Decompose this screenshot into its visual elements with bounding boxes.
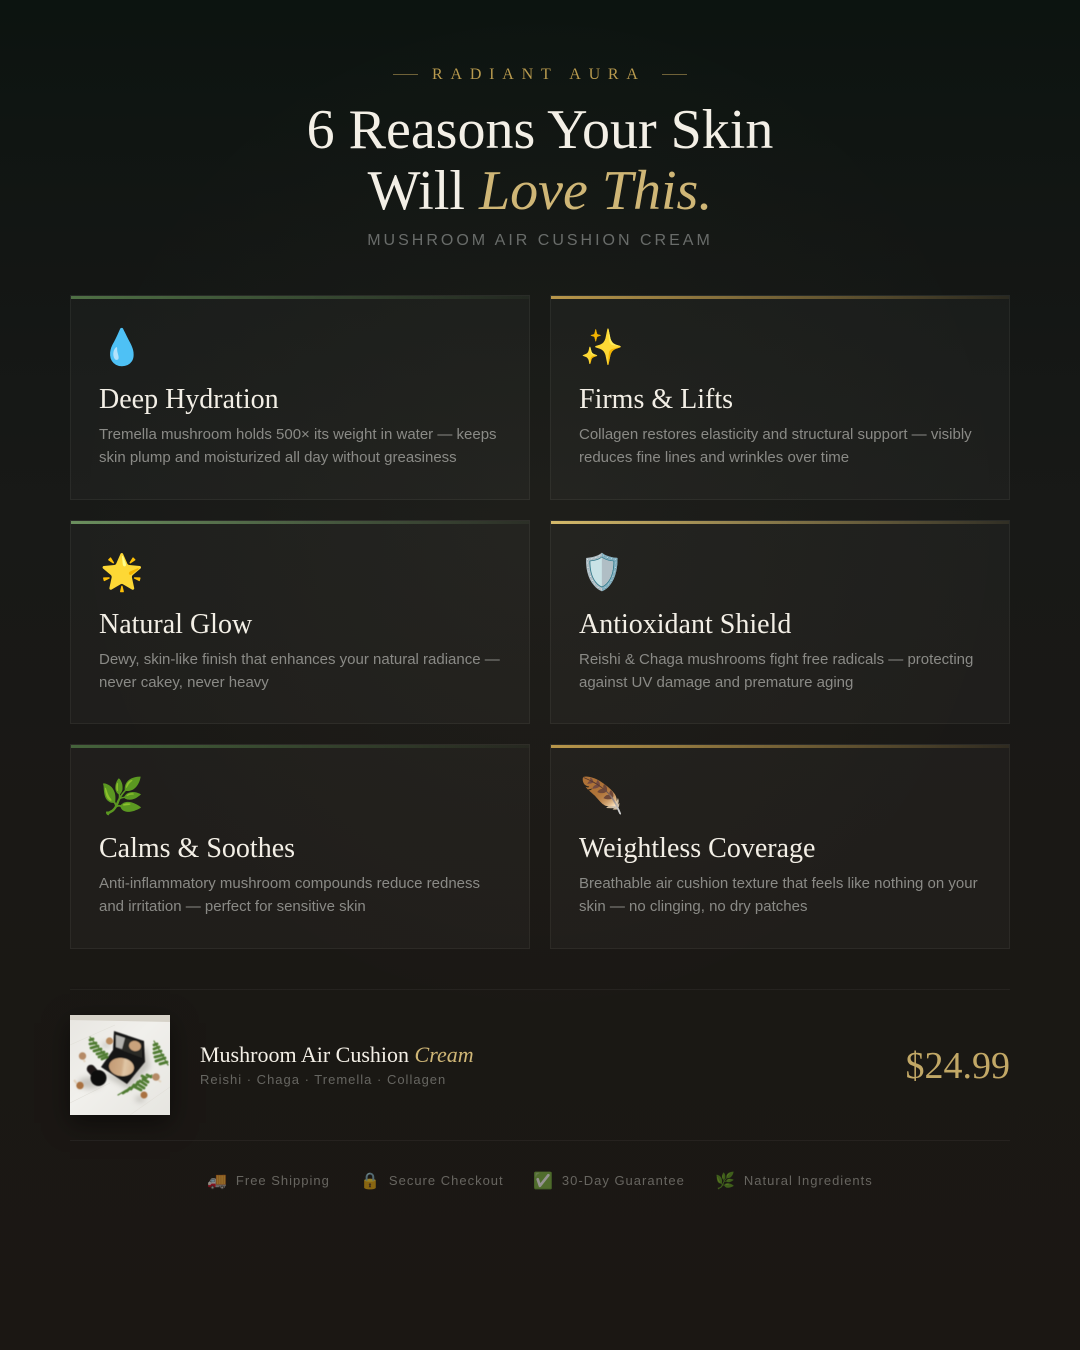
icon: shield: 🛡️ <box>580 552 624 593</box>
text: deep hydration: Tremella mushroom holds 500× its weight in water — keeps skin plump and moisturized all day without greasiness <box>99 426 497 466</box>
title: 6 Reasons Your Skin <box>307 99 773 161</box>
text: weightless coverage: Breathable air cushion texture that feels like nothing on your skin — no clinging, no dry patches <box>579 875 978 915</box>
panel: deep hydration <box>70 295 530 500</box>
brand eyebrow: RADIANT AURA <box>432 66 646 83</box>
text: antioxidant shield: Reishi & Chaga mushrooms fight free radicals — protecting against UV damage and premature aging <box>579 651 973 691</box>
text: calms and soothes: Anti-inflammatory mushroom compounds reduce redness and irritation — perfect for sensitive skin <box>99 875 480 915</box>
product name: Mushroom Air Cushion Cream <box>200 1042 474 1067</box>
title <box>307 99 773 222</box>
panel: antioxidant shield <box>550 520 1010 724</box>
trust: natural ingredients: 🌿 Natural Ingredients <box>715 1171 873 1190</box>
text: natural glow: Dewy, skin-like finish that enhances your natural radiance — never cakey, never heavy <box>99 651 500 691</box>
panel: natural glow <box>70 520 530 724</box>
icon: glowing star: 🌟 <box>100 552 144 593</box>
panel: firms and lifts <box>550 295 1010 500</box>
icon: feather: 🪶 <box>580 776 624 817</box>
icon: water drop: 💧 <box>100 327 144 368</box>
panel: weightless coverage <box>550 744 1010 949</box>
trust: guarantee: ✅ 30-Day Guarantee <box>533 1171 685 1190</box>
text: firms and lifts: Collagen restores elasticity and structural support — visibly reduces fine lines and wrinkles over time <box>579 426 972 466</box>
product ingredients: Reishi · Chaga · Tremella · Collagen <box>200 1072 446 1087</box>
heading: antioxidant shield: Antioxidant Shield <box>579 609 791 640</box>
ferns <box>90 1037 168 1095</box>
heading: weightless coverage: Weightless Coverage <box>579 833 815 864</box>
subtitle: MUSHROOM AIR CUSHION CREAM <box>367 232 713 249</box>
icon: sparkles: ✨ <box>580 327 624 368</box>
product photo <box>70 1015 170 1115</box>
mushrooms <box>74 1037 161 1098</box>
heading: deep hydration: Deep Hydration <box>99 384 279 415</box>
heading: natural glow: Natural Glow <box>99 609 252 640</box>
trust: secure checkout: 🔒 Secure Checkout <box>360 1171 504 1190</box>
icon: herb: 🌿 <box>100 776 144 817</box>
compact <box>101 1031 145 1084</box>
heading: calms and soothes: Calms & Soothes <box>99 833 295 864</box>
trust: free shipping: 🚚 Free Shipping <box>207 1171 330 1190</box>
panel: calms and soothes <box>70 744 530 949</box>
puff <box>91 1069 98 1077</box>
title: Will Love This. <box>368 160 712 222</box>
heading: firms and lifts: Firms & Lifts <box>579 384 733 415</box>
price: $24.99 <box>906 1045 1010 1087</box>
